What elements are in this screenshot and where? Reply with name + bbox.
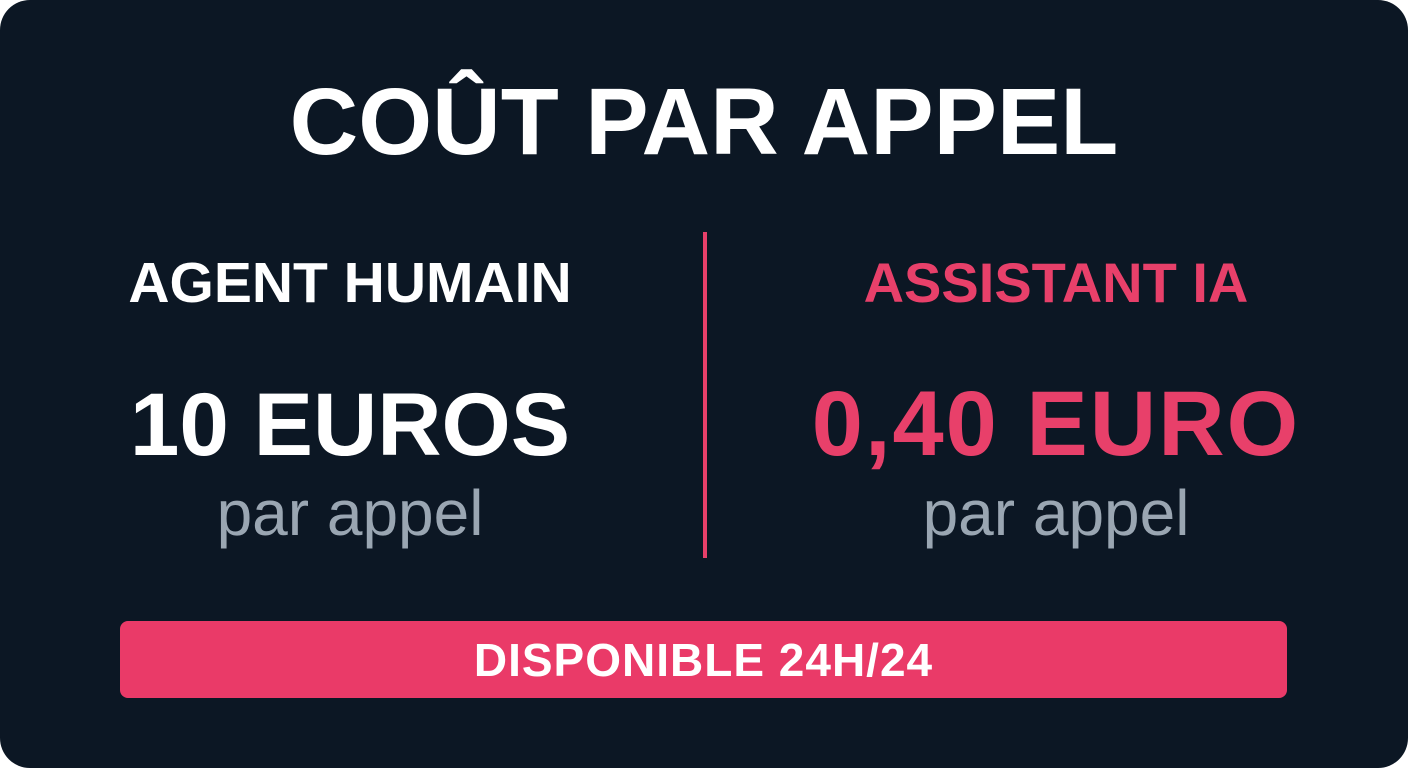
title: COÛT PAR APPEL (290, 69, 1118, 175)
heading: assistant IA: ASSISTANT IA (864, 251, 1248, 314)
subtext: par appel: par appel (217, 477, 483, 549)
banner: disponible 24h/24 (120, 621, 1287, 698)
price: 0,40 euro: 0,40 EURO (812, 373, 1300, 475)
divider (703, 232, 707, 558)
panel: human agent (128, 251, 572, 549)
banner text: DISPONIBLE 24H/24 (474, 634, 933, 686)
panel: AI assistant (812, 251, 1300, 549)
heading: agent humain: AGENT HUMAIN (128, 251, 572, 315)
price: 10 euros: 10 EUROS (130, 374, 570, 474)
subtext: par appel: par appel (923, 477, 1189, 549)
